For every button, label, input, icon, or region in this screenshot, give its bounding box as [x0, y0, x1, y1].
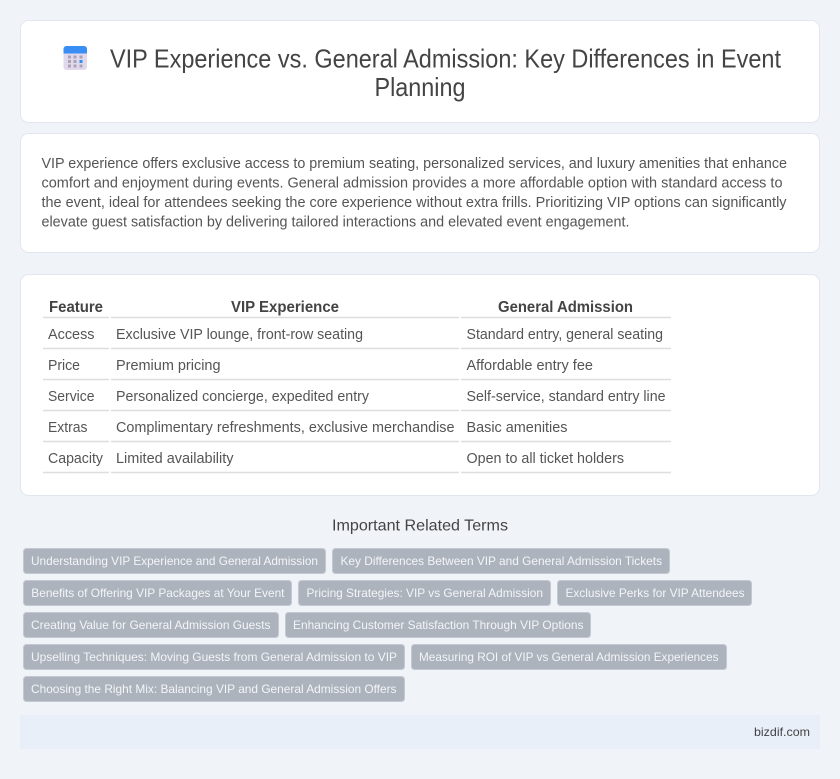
table row: extras: Extras	[48, 420, 88, 436]
table header row	[43, 299, 671, 318]
related terms tags	[24, 548, 752, 702]
tag: Upselling Techniques: Moving Guests from General Admission to VIP	[31, 650, 397, 664]
table row: service: Personalized concierge, expedited entry	[116, 389, 370, 405]
footer	[20, 715, 820, 749]
table header row: VIP Experience	[231, 299, 339, 316]
table row: price	[43, 358, 671, 380]
heading: related terms: Important Related Terms	[332, 518, 508, 534]
tag	[24, 612, 278, 638]
table row: access	[43, 327, 671, 348]
tag	[286, 612, 590, 638]
title: VIP Experience vs. General Admission: Key Differences in Event	[110, 46, 781, 74]
table row: service: Service	[48, 389, 94, 405]
table row: capacity: Capacity	[48, 451, 104, 467]
table row: extras: Complimentary refreshments, exclusive merchandise	[116, 420, 454, 436]
tag: Key Differences Between VIP and General Admission Tickets	[340, 554, 662, 568]
tag	[558, 580, 752, 606]
tag: Exclusive Perks for VIP Attendees	[566, 586, 744, 600]
tag	[24, 580, 292, 606]
footer: bizdif.com	[754, 725, 810, 739]
table row: service: Self-service, standard entry line	[466, 389, 666, 405]
panel: header	[20, 20, 820, 122]
table row: capacity: Limited availability	[116, 451, 234, 467]
table header row: General Admission	[498, 299, 633, 316]
tag	[412, 644, 726, 670]
table row: extras	[43, 420, 671, 442]
text block: description: elevate guest satisfaction by delivering tailored interactions and elevated event engagement.	[42, 214, 630, 230]
panel: description	[20, 134, 820, 252]
table row: capacity: Open to all ticket holders	[466, 451, 624, 467]
tag: Pricing Strategies: VIP vs General Admission	[306, 586, 543, 600]
title: Planning	[374, 74, 466, 102]
text block: description	[42, 156, 787, 230]
table row: access: Access	[48, 327, 94, 343]
tag: Choosing the Right Mix: Balancing VIP and General Admission Offers	[31, 682, 396, 696]
table header row: Feature	[49, 299, 103, 316]
table row: price: Premium pricing	[116, 358, 220, 374]
table row: extras: Basic amenities	[466, 420, 568, 436]
table row: service	[43, 389, 671, 410]
table row: price: Affordable entry fee	[466, 358, 593, 374]
text block: description: comfort and enjoyment during events. General admission provides a more affordable option with standard access to	[42, 176, 782, 192]
tag	[332, 548, 670, 574]
tag: Understanding VIP Experience and General Admission	[31, 554, 318, 568]
tag	[298, 580, 550, 606]
text block: description: the event, ideal for attendees seeking the core experience without extra frills. Prioritizing VIP options can significantly	[42, 195, 787, 211]
text block: description: VIP experience offers exclusive access to premium seating, personalized services, and luxury amenities that enhance	[42, 156, 787, 172]
tag	[24, 676, 404, 702]
tag: Benefits of Offering VIP Packages at Your Event	[31, 586, 285, 600]
tag: Enhancing Customer Satisfaction Through VIP Options	[293, 618, 584, 632]
title	[110, 46, 781, 102]
panel: comparison table	[20, 274, 820, 496]
tag: Measuring ROI of VIP vs General Admission Experiences	[419, 650, 718, 664]
table row: capacity	[43, 451, 671, 472]
icon: calendar	[64, 46, 87, 70]
table row: price: Price	[48, 358, 80, 374]
tag	[24, 644, 404, 670]
tag: Creating Value for General Admission Guests	[31, 618, 270, 632]
table row: access: Standard entry, general seating	[466, 327, 663, 343]
tag	[24, 548, 326, 574]
table row: access: Exclusive VIP lounge, front-row seating	[116, 327, 363, 343]
